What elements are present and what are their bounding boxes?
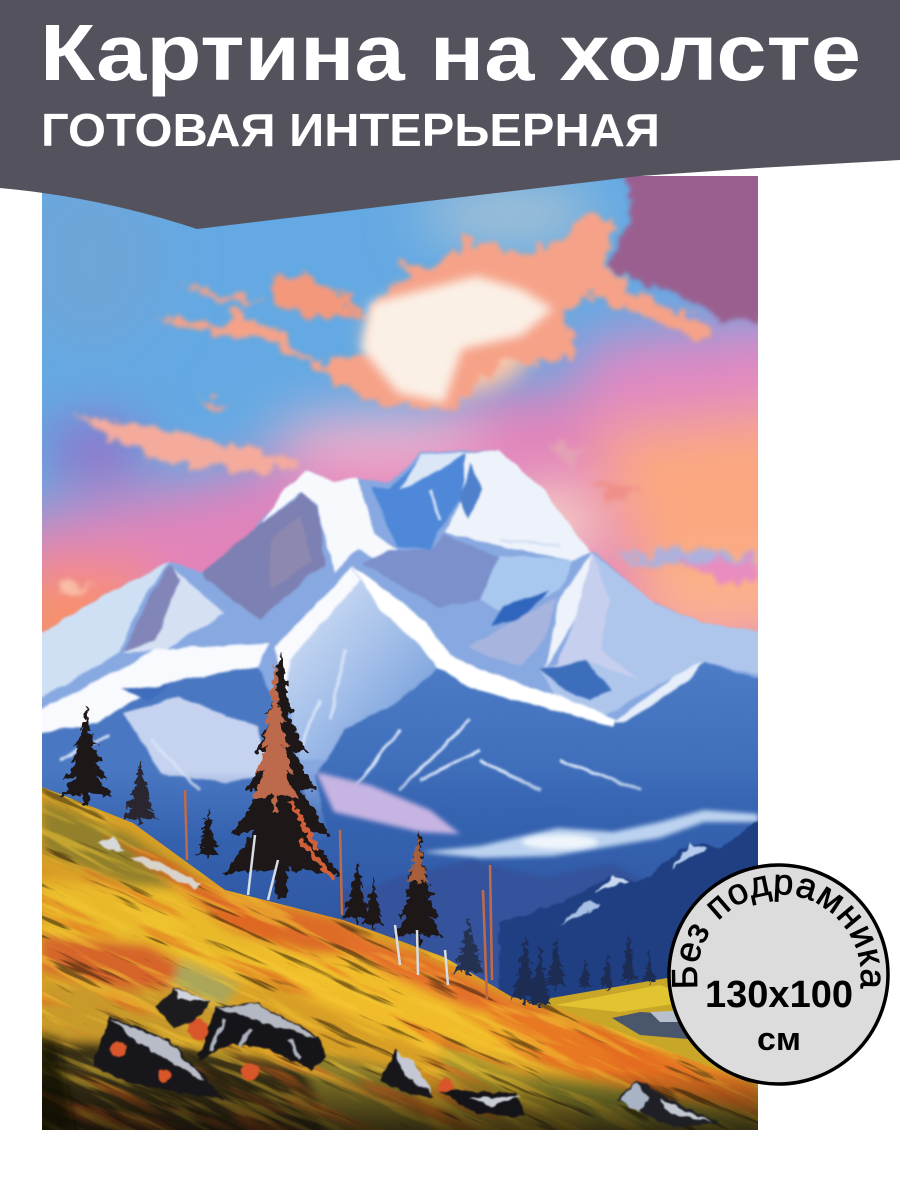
main snow ridge — [352, 565, 615, 727]
unit: см — [757, 1021, 801, 1057]
grey rock face — [202, 493, 325, 620]
central pale face — [286, 568, 422, 760]
large fir tree — [222, 652, 340, 897]
right peak — [540, 553, 770, 717]
foreground rocks — [92, 838, 718, 1127]
header banner — [0, 0, 900, 229]
left snow bands — [30, 643, 270, 735]
sky background — [42, 176, 758, 634]
purple cloud top right — [606, 176, 758, 326]
size: 130x100 — [705, 974, 853, 1016]
subtitle: ГОТОВАЯ ИНТЕРЬЕРНАЯ — [41, 104, 660, 156]
left shoulder snow — [42, 562, 170, 699]
bare trunks — [185, 790, 492, 1000]
snowy mountain massif — [42, 448, 758, 839]
right summit snow — [444, 450, 590, 560]
valley mist — [69, 770, 758, 920]
central blue couloir — [371, 453, 471, 550]
conifer trees — [60, 652, 656, 1010]
sunset clouds — [60, 213, 758, 592]
lavender inner face — [362, 535, 517, 607]
right meadow — [540, 978, 727, 1073]
distant blue ridge — [498, 820, 758, 1003]
curved label: Без подрамника — [672, 874, 881, 989]
lower blue slopes — [316, 662, 770, 850]
left summit snow — [261, 470, 398, 573]
size badge — [667, 863, 890, 1086]
grass texture strokes — [42, 780, 758, 1130]
small hillside stones — [97, 838, 124, 852]
title: Картина на холсте — [40, 8, 861, 97]
canvas painting — [42, 176, 758, 1130]
brush streaks — [60, 490, 640, 800]
orange leaves — [110, 1020, 453, 1092]
hazy distant mountains — [343, 858, 640, 988]
autumn hillside — [30, 780, 758, 1140]
